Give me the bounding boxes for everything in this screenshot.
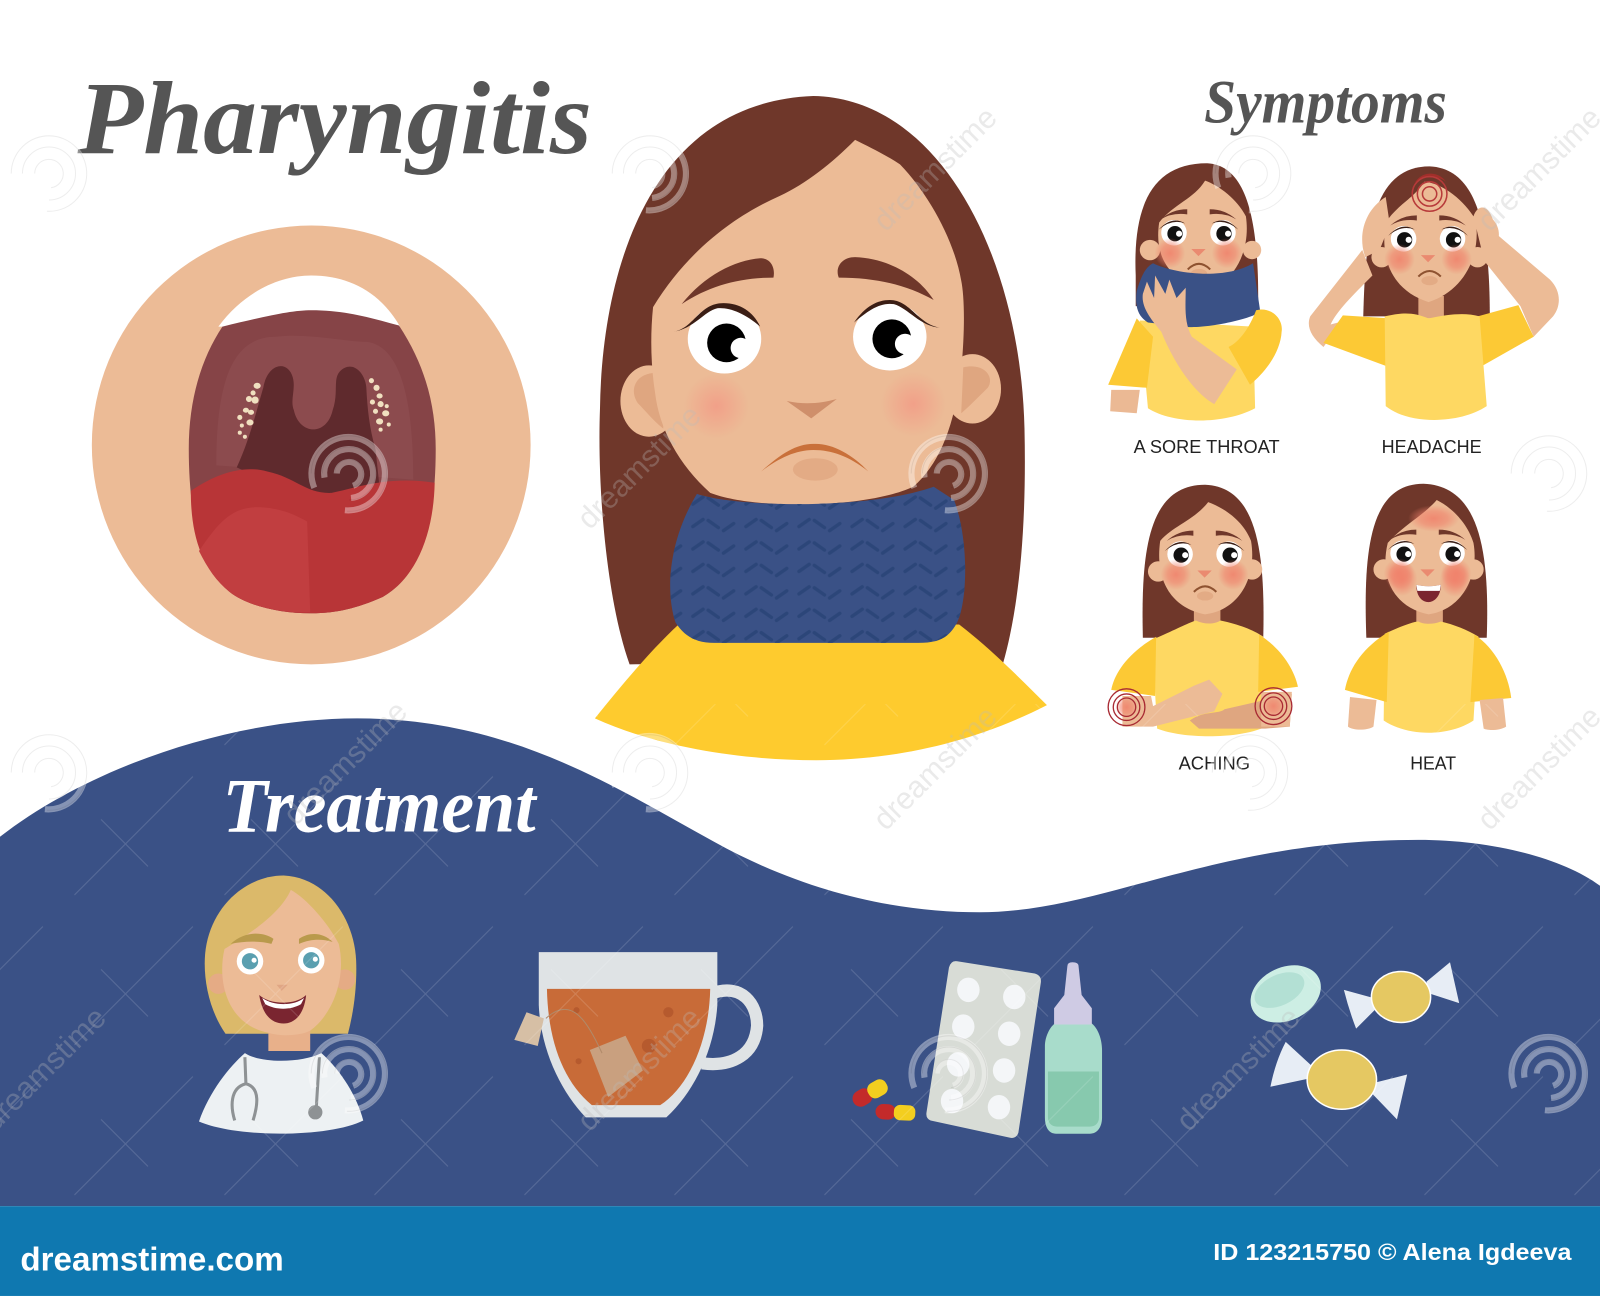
icon: mint candy (1241, 954, 1330, 1033)
right ear (944, 354, 1001, 424)
label: aching: ACHING (1179, 752, 1250, 773)
watermark overlay: dreamstime (1170, 1001, 1307, 1138)
mouth (761, 444, 868, 471)
label: a sore throat: A SORE THROAT (1134, 436, 1280, 457)
tonsil spots left (237, 383, 261, 439)
aching rings right elbow (1255, 688, 1292, 725)
footer credit text: ID 123215750 © Alena Igdeeva (1213, 1239, 1572, 1265)
soft palate arch (216, 336, 413, 480)
watermark overlay: dreamstime (571, 1001, 708, 1138)
scarf (670, 487, 965, 643)
panel: open mouth illustration (92, 226, 531, 664)
aching rings left elbow (1108, 689, 1145, 726)
icon: capsules (850, 1077, 916, 1121)
hair (599, 96, 1025, 664)
footer logo text: dreamstime.com (20, 1241, 284, 1278)
title: Pharyngitis (77, 60, 592, 176)
tongue (191, 469, 435, 613)
mouth upper opening (218, 276, 400, 327)
symptom: sore throat girl (1108, 163, 1282, 420)
treatment panel: blue wave background (0, 718, 1600, 1206)
symptom: heat girl (1345, 484, 1511, 733)
right eye (853, 300, 940, 370)
left eye (673, 303, 761, 374)
symptom: headache girl (1309, 166, 1559, 420)
tonsil spots right (369, 378, 391, 432)
watermark overlay: dreamstime (867, 700, 1004, 837)
mouth interior (189, 310, 436, 613)
icon: wrapped candy top (1344, 962, 1459, 1029)
icon: spray bottle (1045, 962, 1102, 1134)
blush (684, 371, 946, 439)
icon: wrapped candy bottom (1270, 1042, 1407, 1119)
chin (793, 458, 838, 481)
open mouth (1416, 585, 1441, 602)
left ear (620, 365, 678, 437)
nose (787, 399, 837, 418)
watermark overlay: dreamstime (867, 101, 1004, 238)
heading: treatment: Treatment (222, 763, 538, 849)
left eyebrow (682, 258, 774, 304)
icon: doctor (199, 876, 363, 1134)
stethoscope (232, 1057, 321, 1120)
headache rings (1412, 174, 1447, 211)
symptom: aching girl (1108, 485, 1298, 736)
label: heat: HEAT (1410, 752, 1456, 773)
watermark overlay: dreamstime (277, 694, 414, 832)
face (651, 140, 964, 505)
watermark overlay: dreamstime (571, 398, 708, 536)
throat and uvula (237, 366, 380, 500)
panel: main sick girl (595, 96, 1047, 760)
sweater (595, 625, 1047, 760)
label: headache: HEADACHE (1382, 436, 1482, 457)
tongue highlight (199, 507, 310, 612)
forehead flush (1408, 505, 1459, 532)
right eyebrow (838, 257, 934, 300)
footer bar (0, 1206, 1600, 1296)
icon: tea cup (514, 952, 757, 1117)
heading: symptoms: Symptoms (1204, 68, 1447, 136)
icon: blister pack (926, 961, 1041, 1138)
